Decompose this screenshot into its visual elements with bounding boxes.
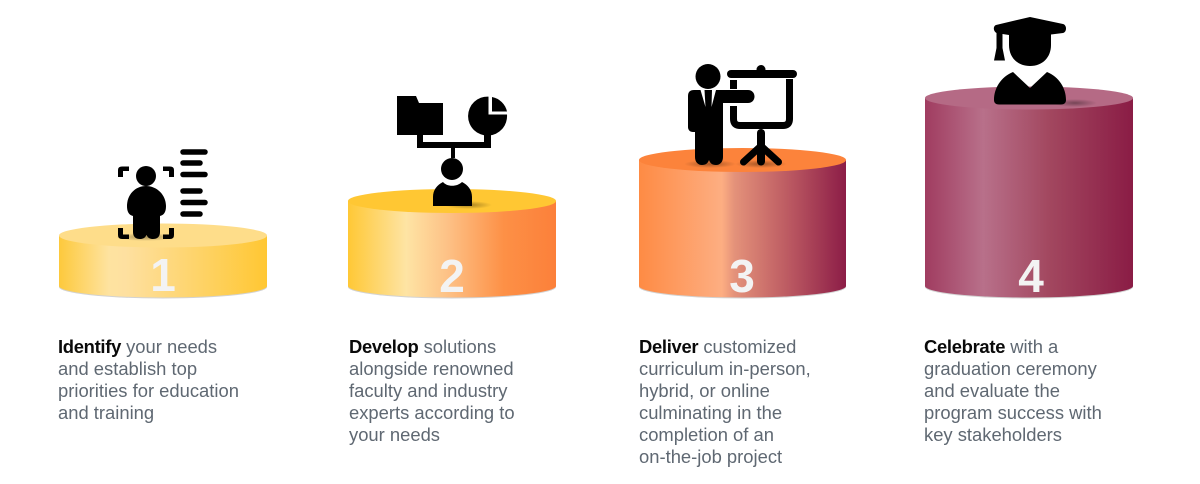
text: identify: and establish top: [58, 358, 197, 379]
podium 1: [59, 224, 267, 298]
text: celebrate: Celebrate with a: [924, 336, 1058, 357]
text: develop: Develop solutions: [349, 336, 496, 357]
text: deliver: Deliver customized: [639, 336, 796, 357]
text: celebrate: graduation ceremony: [924, 358, 1098, 379]
number 4: 4: [1018, 250, 1044, 302]
step 3 panel: [639, 64, 846, 467]
podium 4: [925, 86, 1133, 298]
number 3: 3: [729, 250, 755, 302]
text: develop: experts according to: [349, 402, 515, 423]
text: celebrate: program success with: [924, 402, 1102, 423]
number 1: 1: [150, 249, 176, 301]
text: deliver: on-the-job project: [639, 446, 782, 467]
text: identify: priorities for education: [58, 380, 239, 401]
podium 3: [639, 148, 846, 298]
number 2: 2: [439, 250, 465, 302]
text: develop: faculty and industry: [349, 380, 508, 401]
text: develop: alongside renowned: [349, 358, 514, 379]
text: deliver: curriculum in-person,: [639, 358, 811, 379]
text: deliver: hybrid, or online: [639, 380, 770, 401]
text: celebrate: and evaluate the: [924, 380, 1060, 401]
text: identify: and training: [58, 402, 154, 423]
icon: folder and chart connected to person: [397, 96, 507, 206]
podium 2: [348, 189, 556, 298]
text: develop: your needs: [349, 424, 440, 445]
text: deliver: culminating in the: [639, 402, 782, 423]
step 4 panel: [924, 17, 1133, 445]
step 1 panel: [58, 152, 267, 423]
text: deliver: completion of an: [639, 424, 774, 445]
icon: person with measurement marks: [118, 152, 205, 239]
icon: presenter at board: [688, 64, 797, 165]
text: identify: Identify your needs: [58, 336, 217, 357]
step 2 panel: [348, 96, 556, 445]
text: celebrate: key stakeholders: [924, 424, 1062, 445]
icon: graduate: [994, 17, 1066, 104]
